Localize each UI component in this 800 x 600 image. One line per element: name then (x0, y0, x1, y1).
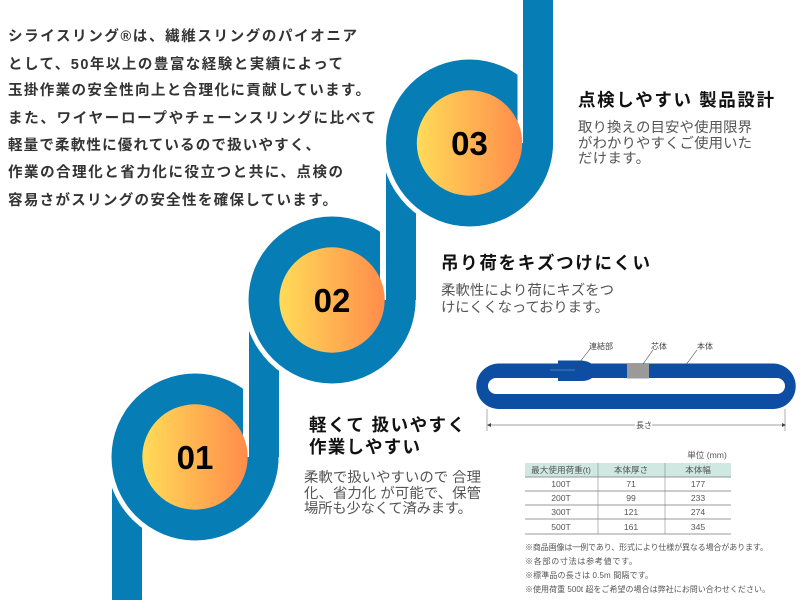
spec table: 200T (551, 493, 572, 503)
spec table: 100T (551, 479, 572, 489)
spec table (525, 449, 731, 534)
table footnotes (525, 542, 770, 594)
intro text block: シライスリング®は、繊維スリングのパイオニア (8, 27, 357, 45)
spec table: 177 (691, 479, 705, 489)
step 01 text: 柔軟で扱いやすいので 合理 (304, 469, 481, 486)
step 01 text: 作業しやすい (309, 437, 420, 457)
step 03 text: だけます。 (578, 150, 650, 167)
spec table: 121 (624, 507, 638, 517)
sling diagram: 連結部 (589, 341, 613, 351)
intro text block: 容易さがスリングの安全性を確保しています。 (8, 191, 337, 209)
step 01 text: 軽くて 扱いやすく (309, 415, 465, 435)
step 02 text: 柔軟性により荷にキズをつ (441, 282, 614, 299)
spec table: 最大使用荷重(t) (531, 464, 591, 475)
spec table: 300T (551, 507, 572, 517)
step 02 text (441, 253, 650, 316)
sling diagram: 本体 (697, 341, 713, 351)
spec table: 71 (626, 479, 636, 489)
intro text block: 軽量で柔軟性に優れているので扱いやすく、 (8, 136, 320, 154)
sling diagram: 長さ (636, 421, 652, 430)
step 01 text: 場所も少なくて済みます。 (304, 500, 472, 517)
step 01 ring (106, 300, 284, 600)
spec table: 99 (626, 493, 636, 503)
step 03 ring: 03 (451, 125, 488, 162)
step 03 text (578, 90, 774, 167)
spec table: 500T (551, 522, 572, 532)
step 02 text: 吊り荷をキズつけにくい (441, 253, 650, 273)
step 03 ring (381, 0, 558, 232)
spec table: 233 (691, 493, 705, 503)
sling diagram (476, 341, 796, 431)
spec table: 161 (624, 522, 638, 532)
intro text block: また、ワイヤーロープやチェーンスリングに比べて (8, 109, 376, 127)
step 01 ring: 01 (177, 439, 213, 476)
step 02 ring (244, 143, 420, 388)
spec table: 345 (691, 522, 705, 532)
intro text block: 玉掛作業の安全性向上と合理化に貢献しています。 (8, 81, 370, 99)
intro text block (8, 27, 376, 209)
step 03 text: 点検しやすい 製品設計 (578, 90, 774, 110)
intro text block: として、50年以上の豊富な経験と実績によって (8, 55, 343, 73)
intro text block: 作業の合理化と省力化に役立つと共に、点検の (8, 163, 343, 181)
table footnotes: ※各部の寸法は参考値です。 (525, 556, 637, 566)
spec table: 本体厚さ (614, 464, 648, 475)
spec table: 本体幅 (685, 464, 711, 475)
step 01 text: 化、省力化 が可能で、保管 (304, 485, 481, 502)
table footnotes: ※使用荷重 500t 超をご希望の場合は弊社にお問い合わせください。 (525, 584, 770, 594)
step 02 text: けにくくなっております。 (441, 299, 609, 316)
sling diagram: 芯体 (651, 341, 667, 351)
spec table: 単位 (mm) (687, 449, 727, 460)
spec table: 274 (691, 507, 705, 517)
table footnotes: ※商品画像は一例であり、形式により仕様が異なる場合があります。 (525, 542, 768, 552)
step 03 text: 取り換えの目安や使用限界 (578, 119, 752, 136)
table footnotes: ※標準品の長さは 0.5m 間隔です。 (525, 570, 653, 580)
step 03 text: がわかりやすくご使用いた (578, 135, 752, 152)
step 02 ring: 02 (314, 282, 350, 319)
step 01 text (304, 415, 481, 517)
